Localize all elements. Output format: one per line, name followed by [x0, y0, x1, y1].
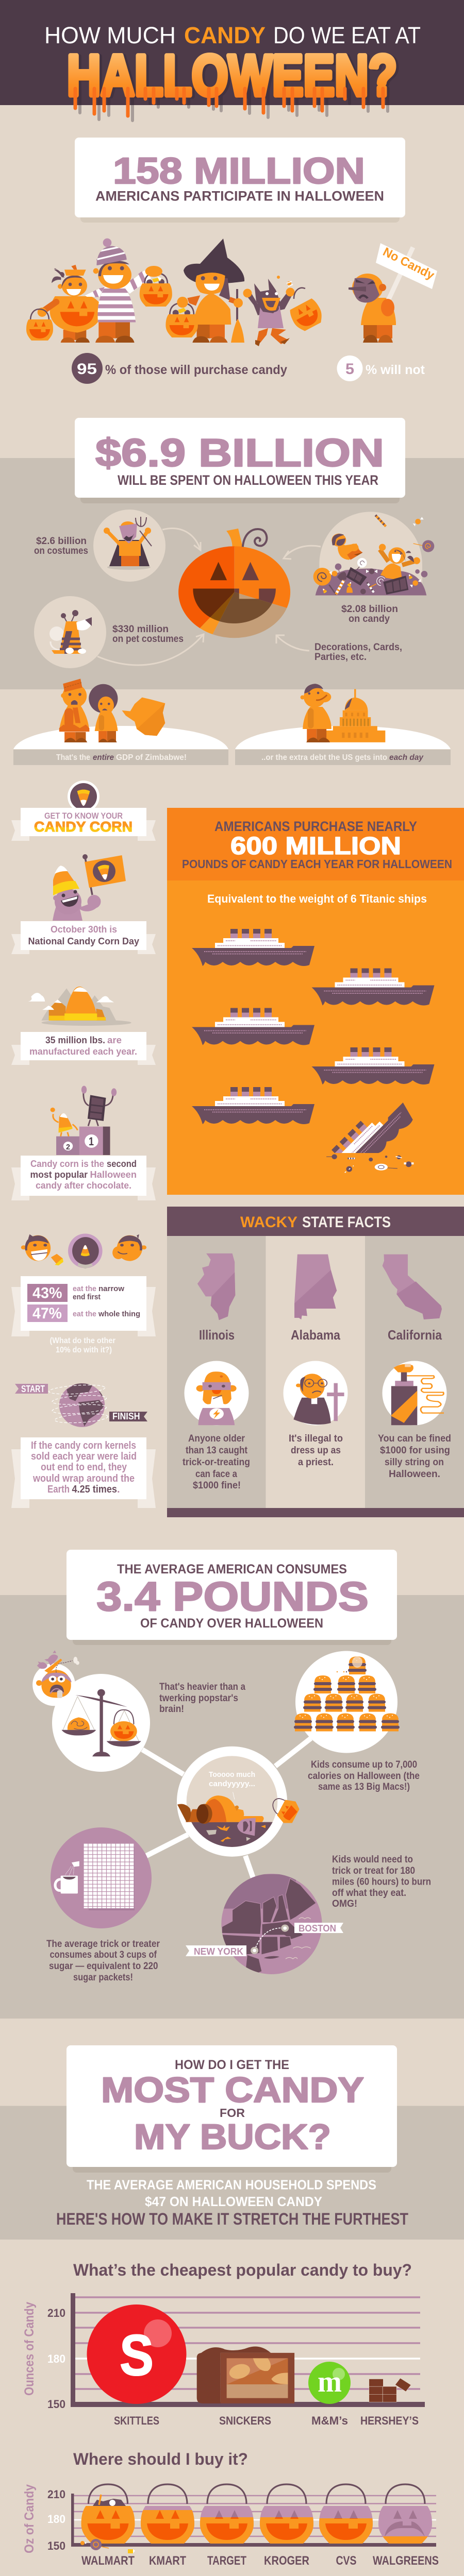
panel: 6.9 billion	[75, 418, 405, 503]
panel: 600 million pounds	[167, 808, 464, 1204]
banner: second most popular: most popular	[30, 1170, 88, 1180]
icon: sinking ship	[332, 1103, 413, 1153]
fact text: Alabama: It's illegal to	[289, 1433, 343, 1444]
speech text: Tooooo much	[209, 1770, 255, 1779]
dripping HALLOWEEN title: HALLOWEEN?	[67, 43, 397, 108]
panel: 3.4 pounds: THE AVERAGE AMERICAN CONSUMES	[117, 1562, 347, 1577]
illustration: trick-or-treaters	[26, 239, 437, 346]
illustration: open-headed kid	[32, 1650, 79, 1706]
chart: ounces per store	[22, 2484, 439, 2568]
axis labels: Oz of Candy	[22, 2484, 37, 2553]
subheading: AMERICANS PARTICIPATE IN HALLOWEEN	[95, 189, 384, 204]
text: trick or treat miles: Kids would need to	[332, 1854, 413, 1865]
Zimbabwe map	[122, 698, 165, 736]
store labels: WALMART	[81, 2554, 135, 2568]
equivalence text: Equivalent to the weight of 6 Titanic ships	[207, 892, 427, 905]
panel: 158 million	[75, 138, 405, 223]
fact text: Illinois: Anyone older	[188, 1433, 245, 1444]
illustration: candy corn mountains	[28, 987, 131, 1026]
arrow: candy to pumpkin	[284, 546, 321, 559]
woman with afro	[89, 684, 118, 742]
axis labels	[22, 2484, 65, 2553]
stat labels: narrow	[98, 1284, 124, 1293]
icon: ship 4	[311, 1047, 434, 1084]
stat: 95 percent purchase candy: 95	[77, 361, 97, 378]
household spend text	[56, 2177, 408, 2228]
bucket: Kroger	[260, 2484, 313, 2544]
arrow: costumes to pumpkin	[162, 529, 201, 550]
skittles candy: S	[120, 2323, 154, 2387]
subheading: WILL BE SPENT ON HALLOWEEN THIS YEAR	[118, 472, 378, 488]
text: sugar	[46, 1939, 160, 1983]
illustration: Frankenstein kid	[185, 1361, 248, 1425]
chart heading: cheapest candy: What’s the cheapest popular candy to buy?	[73, 2261, 412, 2279]
illustration: globe with start and finish flags	[15, 1383, 147, 1427]
pet costumes circle	[34, 596, 106, 668]
illustration: kid lying down after too much candy	[177, 1747, 300, 1857]
axes	[71, 2494, 436, 2547]
spilled candy	[80, 2539, 135, 2553]
state: Illinois	[197, 1253, 235, 1320]
axis labels	[22, 2302, 65, 2411]
banner: 35 million lbs: manufactured each year.	[29, 1046, 137, 1057]
floating candy debris	[326, 1154, 413, 1173]
bucket: Kmart	[141, 2484, 194, 2544]
heading text	[182, 819, 452, 871]
text: trick or treat miles: trick or treat for 180	[332, 1866, 415, 1876]
banner: national candy corn day: October 30th is	[51, 924, 117, 935]
panel: 3.4 pounds: OF CANDY OVER HALLOWEEN	[140, 1616, 323, 1631]
text: sugar: The average trick or treater	[46, 1939, 160, 1950]
banner: second most popular: Candy corn is the	[30, 1159, 104, 1169]
text: heavier than brain: That's heavier than a	[159, 1682, 245, 1692]
panel: wacky state facts	[167, 1207, 464, 1517]
comparison: GDP of Zimbabwe	[13, 679, 228, 765]
heading: WACKY	[240, 1214, 297, 1231]
m&m candy: m	[318, 2365, 342, 2398]
stat: 5 percent will not: % will not	[366, 363, 425, 377]
illustration: podium, chocolate first, candy corn second	[51, 1086, 117, 1155]
arrow: decorations to pumpkin	[276, 635, 309, 651]
text: trick or treat miles: miles (60 hours) to burn	[332, 1876, 431, 1888]
stat labels: eat the	[73, 1284, 96, 1293]
stat: 95 percent purchase candy	[72, 353, 287, 384]
axis labels: 150	[47, 2539, 65, 2552]
title line: HOW MUCH	[44, 22, 176, 48]
axis labels: 180	[47, 2352, 65, 2365]
brand labels	[114, 2414, 419, 2427]
title line: DO WE EAT AT	[273, 22, 421, 48]
section band: consumption	[0, 1595, 464, 2019]
costumes label: $2.6 billion	[36, 536, 87, 547]
bat-costume kid	[243, 276, 326, 346]
banner: 35 million lbs: are	[107, 1035, 122, 1045]
state labels	[199, 1327, 442, 1343]
stat: 95 percent purchase candy: % of those will purchase candy	[105, 363, 287, 377]
comparison: GDP of Zimbabwe: entire	[93, 753, 114, 762]
pet costumes label: $330 million	[112, 624, 169, 635]
title line: CANDY	[184, 22, 266, 48]
icon: ship 2	[311, 969, 434, 1006]
bucket: Target	[200, 2484, 254, 2544]
fact text: Illinois: than 13 caught	[186, 1445, 248, 1456]
heading: STATE FACTS	[302, 1214, 391, 1231]
icon: ship 3	[192, 1008, 314, 1045]
banner: wrap around earth: out end to end, they	[41, 1462, 127, 1473]
store labels: CVS	[336, 2554, 357, 2568]
store labels	[81, 2554, 439, 2568]
section band: spending	[0, 458, 464, 689]
stat: 5 percent will not: 5	[345, 361, 354, 378]
household spend text: $47 ON HALLOWEEN CANDY	[145, 2194, 322, 2209]
banner: second most popular: candy after chocolate.	[36, 1180, 131, 1191]
brand labels: SNICKERS	[219, 2414, 271, 2427]
axis labels: 150	[47, 2398, 65, 2411]
store labels: KROGER	[264, 2554, 309, 2568]
START flag: START	[21, 1384, 45, 1394]
banner: wrap around earth: 4.25 times	[72, 1484, 117, 1495]
header band	[0, 0, 464, 121]
man in hat	[59, 679, 89, 742]
candy label: on candy	[349, 614, 390, 624]
text: calories	[308, 1759, 420, 1792]
costumes label: on costumes	[34, 546, 88, 556]
text: calories: calories on Halloween (the	[308, 1771, 420, 1782]
big heading line 1: MOST CANDY	[101, 2070, 364, 2110]
banner: wrap around earth: would wrap around the	[32, 1473, 135, 1484]
grid lines	[74, 2496, 436, 2536]
fact text: Alabama: a priest.	[298, 1457, 334, 1468]
fact text: California	[378, 1433, 451, 1480]
banner: 35 million lbs	[11, 1032, 156, 1065]
text: heavier than brain: brain!	[159, 1704, 184, 1715]
stat labels	[73, 1284, 140, 1318]
illustration: kid with candy corn hat and flag	[53, 854, 126, 921]
panel: most candy for my buck: FOR	[220, 2106, 245, 2120]
brand labels: HERSHEY’S	[360, 2414, 419, 2427]
chart: ounces of candy per brand	[22, 2293, 425, 2427]
banner: second most popular	[11, 1156, 156, 1200]
question note	[49, 1336, 115, 1354]
illustration: two ways to eat candy corn	[21, 1233, 146, 1269]
household spend text: HERE'S HOW TO MAKE IT STRETCH THE FURTHEST	[56, 2210, 408, 2228]
fact text: Illinois: can face a	[195, 1469, 237, 1480]
fact text: California: silly string on	[385, 1457, 444, 1468]
chart heading: where to buy: Where should I buy it?	[73, 2450, 248, 2468]
illustration: Northeast map	[186, 1874, 343, 1974]
text: trick or treat miles	[332, 1854, 431, 1909]
capitol building being eaten	[325, 689, 385, 742]
comparison: US debt	[235, 684, 451, 765]
panel: most candy for my buck: HOW DO I GET THE	[175, 2058, 289, 2072]
banner: second most popular: second	[107, 1159, 137, 1169]
icon: ship 1	[192, 929, 314, 966]
heading text: 600 MILLION	[230, 833, 401, 860]
axes	[71, 2293, 425, 2407]
comparison: GDP of Zimbabwe: GDP of Zimbabwe!	[116, 753, 187, 762]
banner: wrap around earth: .	[117, 1484, 120, 1495]
illustration: silly string can	[383, 1361, 446, 1425]
axis labels: Ounces of Candy	[22, 2302, 37, 2396]
stat labels: whole thing	[98, 1310, 140, 1318]
banner: wrap around earth: If the candy corn kernels	[31, 1440, 136, 1451]
connector lines	[142, 1738, 311, 1878]
FINISH flag: FINISH	[112, 1411, 140, 1421]
fact text: Illinois	[183, 1433, 250, 1491]
broom	[229, 289, 244, 343]
banner: get to know your candy corn: CANDY CORN	[34, 819, 132, 835]
bucket: Walmart	[81, 2484, 135, 2544]
decorations label: Decorations, Cards,	[314, 642, 402, 653]
illustration: balance scales	[52, 1674, 150, 1772]
state labels: Illinois	[199, 1327, 235, 1343]
stat labels: end first	[73, 1293, 101, 1301]
banner: national candy corn day	[11, 921, 156, 954]
costumes circle	[93, 510, 165, 582]
state labels: California	[388, 1327, 442, 1343]
axis labels: 210	[47, 2488, 65, 2501]
stat box 43 percent: 43%	[32, 1285, 62, 1301]
panel: most candy for my buck	[67, 2045, 397, 2173]
big number: 3.4 POUNDS	[96, 1573, 369, 1619]
fact text: California: Halloween.	[389, 1469, 440, 1480]
state: Alabama	[294, 1255, 337, 1319]
text: trick or treat miles: OMG!	[332, 1899, 357, 1909]
m&m candy	[308, 2362, 351, 2404]
banner: wrap around earth: sold each year were laid	[31, 1451, 137, 1462]
stat: 5 percent will not	[337, 355, 425, 381]
fact text: Illinois: $1000 fine!	[193, 1480, 241, 1491]
podium number 1: 1	[89, 1135, 94, 1148]
heading	[240, 1214, 391, 1231]
small pumpkin bucket left	[26, 309, 53, 341]
panel: 3.4 pounds	[67, 1550, 397, 1645]
candy corn badge	[68, 781, 100, 812]
text: sugar: sugar — equivalent to 220	[49, 1961, 158, 1972]
decorations label: Parties, etc.	[314, 652, 367, 663]
state: California	[383, 1255, 442, 1319]
state labels: Alabama	[291, 1327, 340, 1343]
banner: get to know your candy corn: GET TO KNOW YOUR	[44, 811, 123, 821]
bucket: CVS	[319, 2484, 373, 2544]
illustration: burgers	[294, 1651, 400, 1753]
question note: (What do the other	[49, 1336, 115, 1345]
grid lines	[75, 2297, 420, 2389]
grumpy candy-refuser with sign	[349, 243, 437, 343]
kid in pumpkin costume	[38, 265, 102, 343]
text: calories: Kids consume up to 7,000	[311, 1759, 417, 1770]
title line	[44, 22, 421, 48]
bucket: Walgreens	[378, 2484, 432, 2544]
witch hat	[184, 239, 244, 284]
banner: wrap around earth: Earth	[47, 1484, 70, 1495]
pet costumes label: on pet costumes	[112, 634, 184, 645]
household spend text: THE AVERAGE AMERICAN HOUSEHOLD SPENDS	[87, 2177, 376, 2193]
big number: 158 MILLION	[113, 151, 365, 192]
speech text: candyyyyy...	[209, 1780, 255, 1788]
section band: most candy	[0, 2106, 464, 2240]
fact text: California: $1000 for using	[380, 1445, 450, 1456]
man eating capitol	[301, 684, 332, 742]
question note: 10% do with it?)	[56, 1346, 112, 1354]
heading text: AMERICANS PURCHASE NEARLY	[214, 819, 417, 834]
witch kid	[165, 273, 231, 343]
skittles candy	[87, 2304, 187, 2404]
candy label: $2.08 billion	[341, 604, 398, 615]
store labels: WALGREENS	[373, 2554, 439, 2568]
fact text: Illinois: trick-or-treating	[183, 1457, 250, 1468]
comparison: US debt: ..or the extra debt the US gets into	[261, 753, 387, 762]
podium number 2: 2	[66, 1143, 70, 1151]
text: sugar: consumes about 3 cups of	[49, 1950, 157, 1960]
banner: national candy corn day: National Candy Corn Day	[28, 936, 139, 946]
pet costumes label	[112, 624, 184, 645]
axis labels: 210	[47, 2307, 65, 2319]
text: trick or treat miles: off what they eat.	[332, 1888, 406, 1899]
no candy sign: No Candy	[380, 245, 437, 283]
text: sugar: sugar packets!	[73, 1972, 133, 1983]
illustration: priest	[284, 1361, 347, 1425]
arrow: pet costumes to pumpkin	[97, 634, 204, 665]
brand labels: M&M’s	[311, 2414, 348, 2427]
snickers bar	[197, 2346, 294, 2403]
text: heavier than brain: twerking popstar's	[159, 1693, 238, 1704]
big number: $6.9 BILLION	[95, 431, 384, 475]
store labels: TARGET	[207, 2554, 246, 2568]
costumes label	[34, 536, 88, 556]
NEW YORK label: NEW YORK	[194, 1946, 243, 1957]
pumpkin pie chart	[178, 528, 291, 638]
comparison: US debt: each day	[389, 753, 424, 762]
store labels: KMART	[149, 2554, 186, 2568]
banner: 35 million lbs: 35 million lbs.	[45, 1035, 105, 1045]
hershey bar	[369, 2378, 411, 2402]
big heading line 2: MY BUCK?	[134, 2117, 331, 2157]
text: heavier than brain	[159, 1682, 245, 1715]
fact text: California: You can be fined	[378, 1433, 451, 1444]
speech text	[209, 1770, 255, 1788]
banner: get to know your candy corn	[11, 808, 156, 841]
banner: wrap around earth	[11, 1437, 156, 1508]
stat labels: eat the	[73, 1310, 96, 1318]
banner: second most popular: Halloween	[90, 1170, 137, 1180]
brand labels: SKITTLES	[114, 2414, 159, 2427]
illustration: sugar packets and mug	[51, 1827, 152, 1928]
BOSTON label: BOSTON	[299, 1923, 336, 1934]
axis labels: 180	[47, 2513, 65, 2526]
candy pile circle	[313, 512, 434, 596]
tipped-over bucket	[273, 1799, 300, 1823]
kid in striped sweater	[85, 239, 172, 343]
stat box 47 percent: 47%	[32, 1305, 62, 1322]
fact text: Alabama	[289, 1433, 343, 1468]
fact text: Alabama: dress up as	[291, 1445, 341, 1456]
comparison: GDP of Zimbabwe: That's the	[56, 753, 90, 762]
banner: eat preferences	[11, 1276, 156, 1336]
text: calories: same as 13 Big Macs!)	[318, 1782, 410, 1792]
candy label	[341, 604, 398, 624]
icon: ship 5	[192, 1087, 314, 1124]
decorations label	[314, 642, 402, 663]
